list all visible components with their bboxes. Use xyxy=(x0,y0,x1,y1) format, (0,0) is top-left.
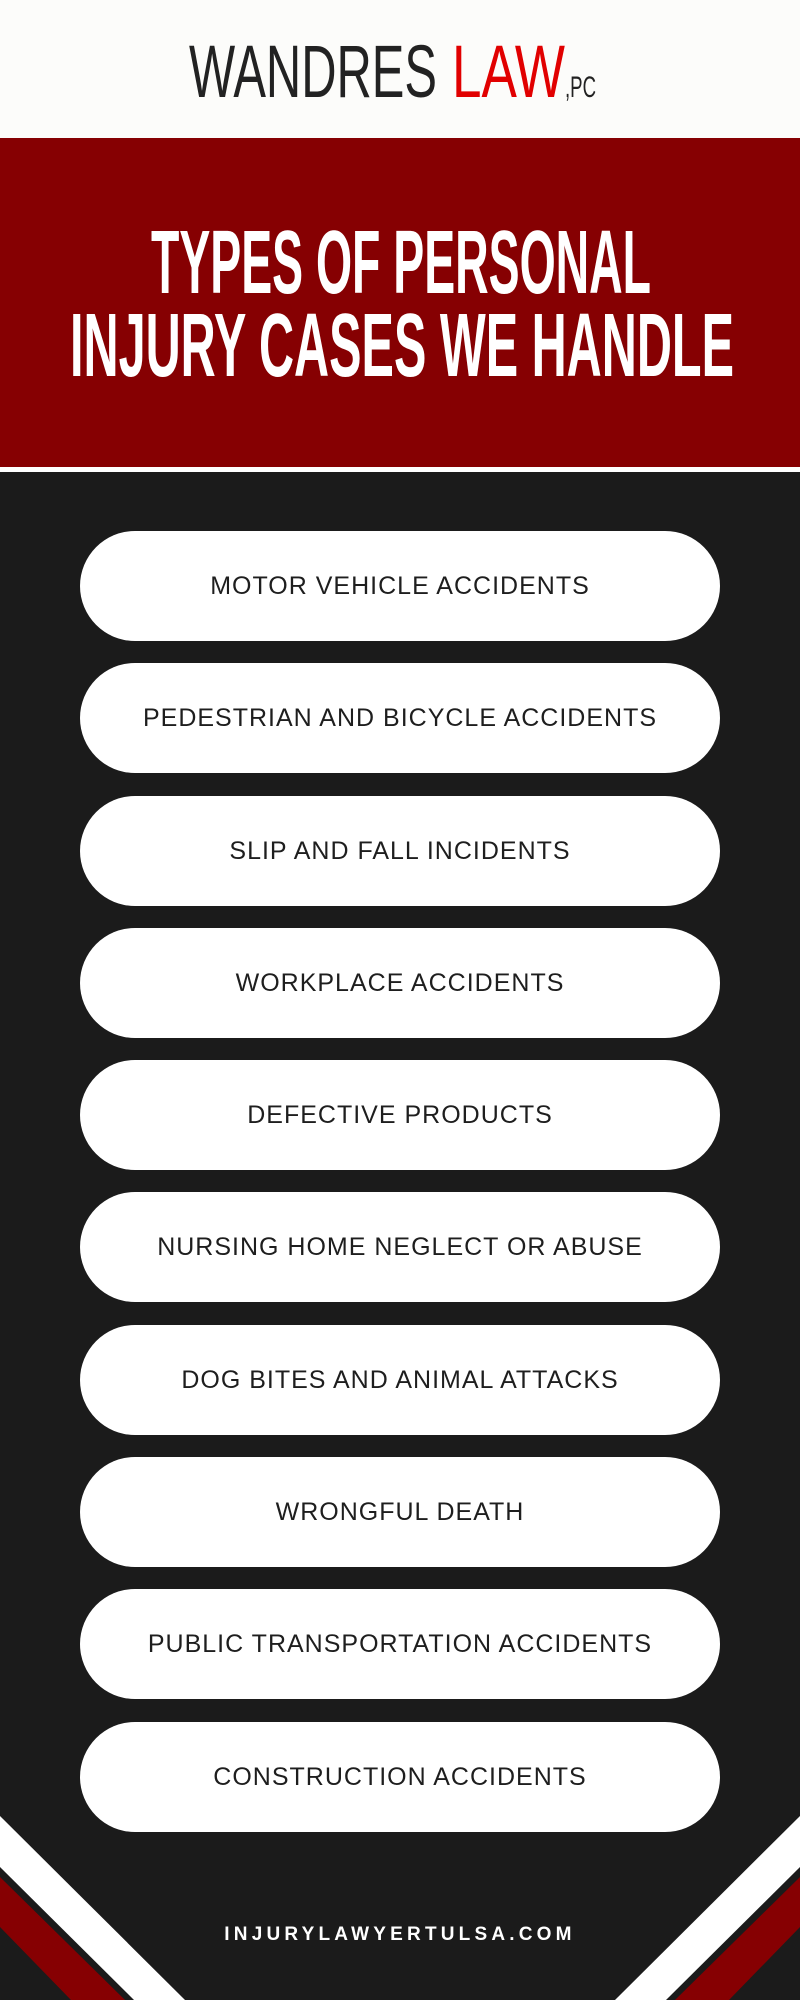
pill: dog bites xyxy=(80,1325,720,1435)
pill: workplace xyxy=(80,928,720,1038)
logo: LAW xyxy=(452,30,565,113)
pill: slip and fall: SLIP AND FALL INCIDENTS xyxy=(229,836,571,864)
title xyxy=(70,213,734,396)
pill: wrongful death: WRONGFUL DEATH xyxy=(276,1498,524,1526)
pill: slip and fall xyxy=(80,796,720,906)
pill: motor vehicle: MOTOR VEHICLE ACCIDENTS xyxy=(210,572,590,600)
pill: dog bites: DOG BITES AND ANIMAL ATTACKS xyxy=(181,1366,619,1394)
pill: pedestrian: PEDESTRIAN AND BICYCLE ACCIDENTS xyxy=(143,704,657,732)
pill: nursing home: NURSING HOME NEGLECT OR ABUSE xyxy=(157,1232,643,1260)
pill: nursing home xyxy=(80,1192,720,1302)
pill: defective products: DEFECTIVE PRODUCTS xyxy=(247,1100,553,1128)
pill: public transportation: PUBLIC TRANSPORTATION ACCIDENTS xyxy=(148,1630,652,1658)
title banner xyxy=(0,138,800,472)
footer url: INJURYLAWYERTULSA.COM xyxy=(224,1924,576,1945)
pill: workplace: WORKPLACE ACCIDENTS xyxy=(236,968,564,996)
pill: pedestrian xyxy=(80,663,720,773)
logo: ,PC xyxy=(565,71,596,104)
header: logo area xyxy=(0,0,800,138)
pill: motor vehicle xyxy=(80,531,720,641)
pill: defective products xyxy=(80,1060,720,1170)
pill: wrongful death xyxy=(80,1457,720,1567)
pill: public transportation xyxy=(80,1589,720,1699)
pill: construction xyxy=(80,1722,720,1832)
logo: WANDRES xyxy=(189,30,437,113)
pill: construction: CONSTRUCTION ACCIDENTS xyxy=(213,1762,587,1790)
